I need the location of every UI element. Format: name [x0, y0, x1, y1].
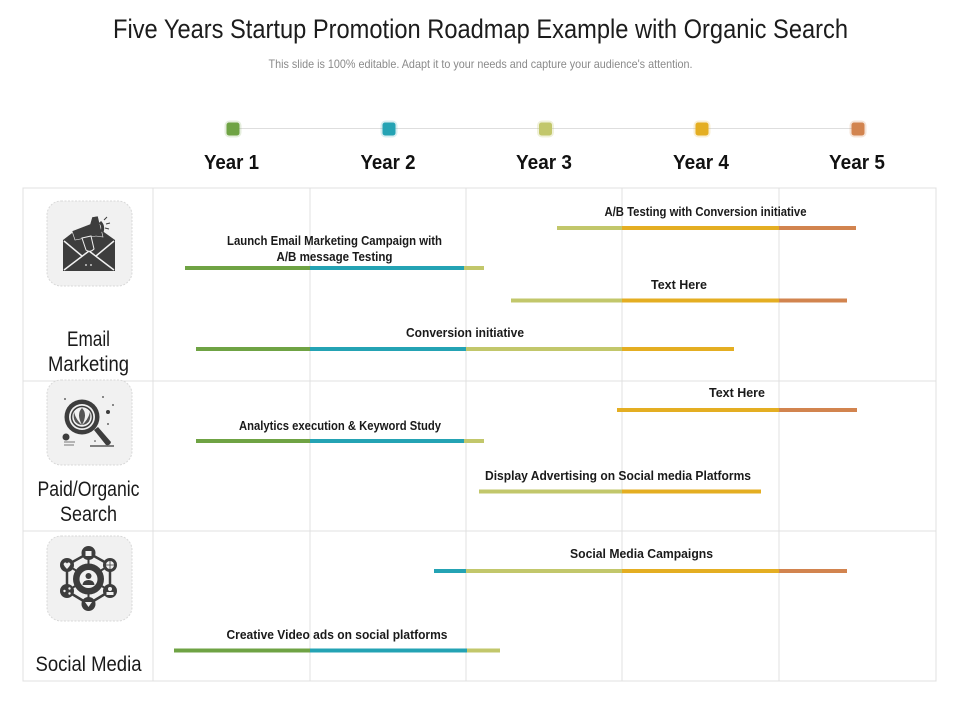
task: display advertising on social media platforms	[479, 468, 761, 494]
row label: email marketing: Email	[67, 328, 110, 351]
icon tile: paid organic search	[47, 380, 132, 465]
row: social media	[36, 536, 142, 676]
title: Five Years Startup Promotion Roadmap Example with Organic Search	[113, 14, 848, 44]
year 4 label: Year 4	[673, 152, 730, 174]
timeline	[224, 120, 866, 138]
task: creative video ads on social platforms: Creative Video ads on social platforms	[226, 627, 448, 642]
task: social media campaigns: Social Media Campaigns	[570, 546, 713, 561]
icon tile: email marketing	[47, 201, 132, 286]
year 1 marker	[224, 120, 242, 138]
year 5 label: Year 5	[829, 152, 885, 174]
task: text here upper: Text Here	[651, 277, 707, 292]
year 2 label: Year 2	[360, 152, 416, 174]
task: analytics execution and keyword study: Analytics execution & Keyword Study	[239, 418, 442, 433]
task: analytics execution and keyword study	[196, 418, 484, 443]
row label: paid organic search: Search	[60, 503, 117, 526]
year 3 label: Year 3	[516, 152, 572, 174]
task: A/B testing with conversion initiative	[557, 204, 856, 230]
row label: email marketing: Marketing	[48, 353, 129, 376]
grid table	[23, 188, 936, 681]
task: text here upper	[511, 277, 847, 302]
task: text here lower: Text Here	[709, 385, 765, 400]
task: creative video ads on social platforms	[174, 627, 500, 652]
task: launch email marketing campaign	[185, 233, 484, 270]
task: social media campaigns	[434, 546, 847, 573]
year 5 marker	[850, 120, 866, 138]
task: launch email marketing campaign: A/B message Testing	[276, 249, 393, 264]
row label: paid organic search: Paid/Organic	[38, 478, 140, 501]
year 1 label: Year 1	[204, 152, 259, 174]
row: paid organic search	[38, 380, 140, 526]
row: email marketing	[47, 201, 132, 376]
task: display advertising on social media platforms: Display Advertising on Social media Platforms	[485, 468, 751, 483]
year 3 marker	[537, 120, 554, 138]
task: A/B testing with conversion initiative: A/B Testing with Conversion initiative	[604, 204, 806, 219]
task: text here lower	[617, 385, 857, 412]
icon tile: social media	[47, 536, 132, 621]
task: launch email marketing campaign: Launch Email Marketing Campaign with	[227, 233, 442, 248]
task: conversion initiative	[196, 325, 734, 351]
subtitle: This slide is 100% editable. Adapt it to your needs and capture your audience's attention.	[268, 57, 692, 71]
row label: social media: Social Media	[36, 653, 142, 676]
year 4 marker	[694, 120, 710, 138]
year 2 marker	[380, 120, 398, 138]
task: conversion initiative: Conversion initiative	[406, 325, 524, 340]
